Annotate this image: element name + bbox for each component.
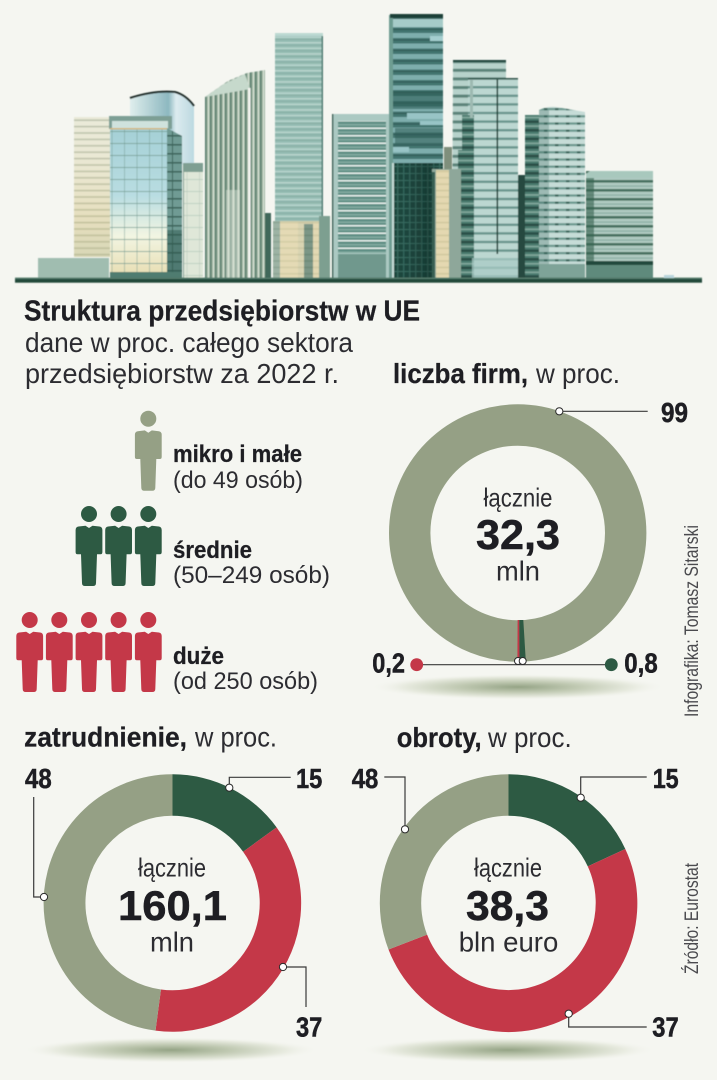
callout: 48 xyxy=(25,763,52,901)
label: duże: (od 250 osób) xyxy=(173,668,318,695)
subtitle xyxy=(25,327,353,389)
illustration: city skyline xyxy=(15,14,702,283)
subtitle: dane w proc. całego sektora xyxy=(25,327,353,358)
callout: 15: 15 xyxy=(296,763,322,794)
center total: łącznie xyxy=(138,853,206,883)
callout: 48: 48 xyxy=(352,763,378,794)
segment: średnie 15 xyxy=(172,774,277,852)
building: pale tan tower xyxy=(74,117,110,257)
callout: 15 xyxy=(577,763,679,801)
building: window tower xyxy=(525,107,585,278)
chart: zatrudnienie donut xyxy=(23,763,322,1063)
center total: łącznie xyxy=(474,853,542,883)
callout: 48: 48 xyxy=(25,763,52,794)
heading: liczba firm: liczba firm, xyxy=(393,358,528,389)
building: main glass tower xyxy=(109,116,182,278)
heading: obroty: obroty, xyxy=(397,722,482,753)
center total: mln xyxy=(150,927,194,958)
label: średnie: średnie xyxy=(173,537,252,564)
label: duże xyxy=(173,643,318,695)
label: mikro i małe xyxy=(173,441,303,494)
icon: one person xyxy=(135,411,162,491)
subtitle: przedsiębiorstw za 2022 r. xyxy=(25,358,339,389)
callout: 37: 37 xyxy=(652,1012,679,1043)
title: Struktura przedsiębiorstw w UE xyxy=(24,296,420,328)
shadow xyxy=(360,1037,656,1063)
center total: 160,1 xyxy=(118,882,227,929)
building: tall pale teal tower xyxy=(273,33,330,278)
ground line xyxy=(15,275,702,283)
center total: 38,3 xyxy=(466,882,549,929)
building: office block xyxy=(332,114,391,278)
segment: średnie 0,8 xyxy=(519,620,526,661)
label: duże: duże xyxy=(173,643,224,670)
center total: bln euro xyxy=(459,927,558,958)
building: pale block behind xyxy=(183,163,203,278)
callout: 15: 15 xyxy=(653,763,679,794)
building: dark narrow block xyxy=(518,175,525,278)
building: low office block xyxy=(586,171,653,278)
legend: średnie xyxy=(76,506,330,589)
shadow xyxy=(23,1037,319,1063)
icon: five persons xyxy=(16,612,162,692)
heading: zatrudnienie: w proc. xyxy=(194,722,277,753)
center total: łącznie xyxy=(484,483,552,513)
heading: obroty xyxy=(397,722,572,753)
shadow xyxy=(370,674,666,700)
callout: 37 xyxy=(279,963,322,1043)
legend: duże xyxy=(16,612,318,695)
label: średnie xyxy=(173,537,330,589)
building: tan tower xyxy=(432,169,461,278)
center total: mln xyxy=(496,556,540,587)
label: średnie: (50–249 osób) xyxy=(173,562,330,589)
segment: duże 0,2 xyxy=(517,620,520,661)
chart: liczba firm donut xyxy=(370,397,688,700)
callout: 0,2 and 0,8: 0,2 xyxy=(372,648,405,679)
segment: mikro i małe 48 xyxy=(44,774,172,1031)
center total: 32,3 xyxy=(476,511,560,558)
center total xyxy=(118,853,227,958)
credit: infographic author: Infografika: Tomasz Sitarski xyxy=(681,525,703,717)
center total xyxy=(459,853,558,958)
callout: 15 xyxy=(226,763,322,794)
center total xyxy=(476,483,560,587)
credit: source: Źródło: Eurostat xyxy=(680,863,703,974)
callout: 99: 99 xyxy=(661,397,688,428)
callout: 48 xyxy=(352,763,409,833)
building: left podium xyxy=(38,258,109,278)
callout: 37: 37 xyxy=(296,1012,322,1043)
legend: mikro i małe xyxy=(135,411,303,494)
segment: średnie 15 xyxy=(508,774,625,866)
building: tallest dark glass tower xyxy=(389,14,443,278)
segment: mikro i małe 48 xyxy=(380,774,508,950)
callout: 0,2 and 0,8: 0,8 xyxy=(624,648,658,679)
callout: 37 xyxy=(565,1010,679,1043)
callout: 99 xyxy=(556,397,688,428)
heading: zatrudnienie: zatrudnienie, xyxy=(24,722,187,753)
icon: three persons xyxy=(76,506,162,586)
heading: zatrudnienie xyxy=(24,722,277,753)
label: mikro i małe: mikro i małe xyxy=(173,441,302,468)
callout: 0,2 and 0,8 xyxy=(372,648,658,679)
heading: liczba firm xyxy=(393,358,620,389)
heading: liczba firm: w proc. xyxy=(535,358,620,389)
heading: obroty: w proc. xyxy=(487,722,572,753)
segment: duże 37 xyxy=(388,849,637,1032)
chart: obroty donut xyxy=(352,763,679,1063)
segment: mikro i małe 99 xyxy=(410,425,626,641)
building: back striped tower xyxy=(444,60,506,278)
building: domed tower xyxy=(130,92,194,165)
building: vertical striped tower xyxy=(205,70,271,278)
label: mikro i małe: (do 49 osób) xyxy=(173,467,303,494)
building: front striped tower xyxy=(462,78,518,278)
segment: duże 37 xyxy=(156,827,301,1032)
